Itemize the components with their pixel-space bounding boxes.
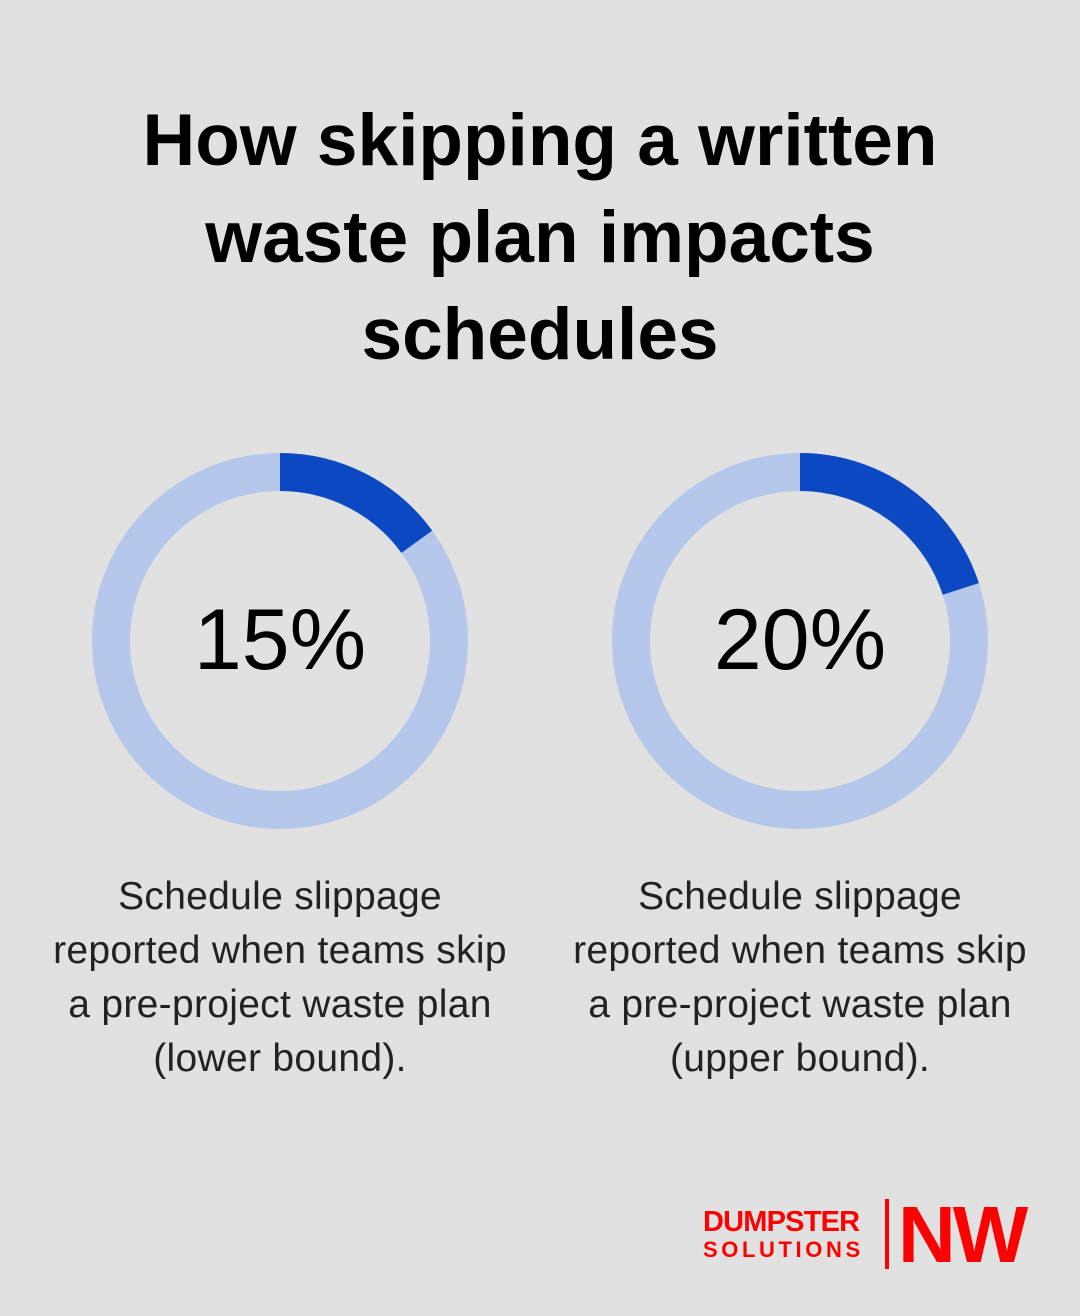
logo: SOLUTIONS [703, 1237, 864, 1262]
caption: lower bound: a pre-project waste plan [68, 983, 492, 1026]
caption: lower bound: Schedule slippage [118, 875, 442, 918]
title: waste plan impacts [205, 197, 875, 278]
caption: upper bound [573, 875, 1027, 1080]
logo: NW [898, 1190, 1025, 1279]
title: How skipping a written [143, 100, 937, 181]
caption: upper bound: Schedule slippage [638, 875, 962, 918]
caption: upper bound: reported when teams skip [573, 929, 1027, 972]
caption: lower bound: reported when teams skip [53, 929, 507, 972]
logo: DUMPSTER [703, 1206, 859, 1238]
caption: lower bound [53, 875, 507, 1080]
title: schedules [361, 294, 719, 375]
title [143, 100, 937, 375]
stat: 15%: 15% [194, 592, 366, 688]
logo [703, 1190, 1028, 1279]
caption: lower bound: (lower bound). [153, 1037, 407, 1080]
caption: upper bound: a pre-project waste plan [588, 983, 1012, 1026]
donut chart: 15% [92, 453, 468, 829]
caption: upper bound: (upper bound). [670, 1037, 930, 1080]
donut chart: 20% [612, 453, 988, 829]
stat: 20%: 20% [714, 592, 886, 688]
